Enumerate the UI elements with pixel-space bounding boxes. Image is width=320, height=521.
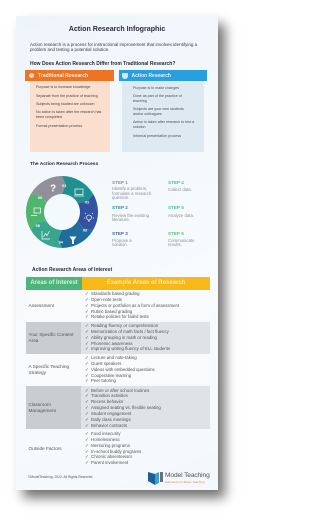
checklist: ✓ Recess behavior — [85, 399, 123, 404]
segment numbers: 06 — [38, 196, 42, 200]
checklist: ✓ Open-note tests — [85, 297, 122, 302]
step 2 — [112, 205, 149, 222]
checklist: ✓ Daily class meetings — [85, 417, 131, 422]
header bar — [119, 70, 207, 81]
segment numbers: 05 — [36, 224, 40, 228]
checklist: ✓ Videos with embedded questions — [85, 367, 155, 372]
list item: Purpose is to increase knowledge — [36, 85, 90, 89]
title: Action Research Infographic — [69, 25, 165, 33]
checklist — [85, 388, 161, 428]
step 6 — [168, 231, 195, 247]
list item: been completed — [36, 114, 62, 118]
segment numbers: 03 — [83, 228, 87, 232]
checklist — [85, 291, 180, 319]
list item: Subjects are your own students — [133, 107, 184, 111]
checklist: ✓ Food insecurity — [85, 431, 121, 436]
checklist: ✓ Projects or portfolios as a form of assessment — [85, 303, 179, 308]
table header: example areas: Example Areas of Research — [107, 280, 185, 286]
step label: STEP 1 — [112, 180, 128, 185]
step 4 — [168, 180, 192, 192]
segment numbers: 01 — [62, 184, 66, 188]
step text — [112, 186, 152, 200]
heading: comparison: How Does Action Research Differ from Traditional Research? — [30, 60, 175, 66]
panel: traditional research — [25, 70, 114, 152]
copyright: ©ModelTeaching, 2022. All Rights Reserved — [28, 475, 92, 479]
checklist: ✓ Standards based grading — [85, 291, 140, 296]
list item: teaching — [133, 98, 147, 102]
list item — [133, 107, 184, 116]
row label: Management — [28, 408, 56, 413]
icon: shield — [122, 72, 128, 78]
checklist: ✓ In-school buddy programs — [85, 449, 141, 454]
panel heading: Traditional Research — [38, 73, 88, 79]
logo: Model Teaching — [148, 472, 210, 485]
list item: No action is taken after the research has — [36, 110, 101, 114]
row label: A Specific Teaching — [28, 364, 69, 369]
row label: Strategy — [28, 370, 46, 375]
checklist: ✓ Cooperative learning — [85, 373, 131, 378]
list item: Subjects being studied are unknown — [36, 102, 94, 106]
segment numbers: 04 — [59, 240, 64, 244]
row label: Area — [28, 338, 38, 343]
row label — [28, 364, 69, 375]
checklist: ✓ Guest speakers — [85, 361, 121, 366]
list item: Action is taken after research to test a — [133, 120, 194, 124]
table: areas of interest — [26, 277, 210, 465]
step label: STEP 4 — [168, 180, 184, 185]
table header: areas of interest — [26, 277, 82, 290]
checklist: ✓ Memorization of math facts / fact fluency — [85, 329, 169, 334]
row: assessment — [26, 290, 210, 321]
intro text: problem and testing a potential solution. — [30, 47, 110, 52]
step text: formulate a research — [112, 190, 151, 196]
table header: areas of interest: Areas of Interest — [30, 280, 78, 286]
heading: process: The Action Research Process — [30, 162, 98, 167]
step text: Communicate — [168, 238, 195, 242]
checklist: ✓ Parent involvement — [85, 460, 128, 465]
row: classroom management — [26, 386, 210, 429]
checklist: ✓ Lecture and note-taking — [85, 355, 137, 360]
row label: Assessment — [28, 303, 54, 308]
icon: light bulb — [84, 213, 94, 221]
step text — [112, 238, 132, 247]
list item — [133, 94, 182, 103]
list item: and/or colleagues — [133, 112, 162, 116]
icon: book — [148, 472, 163, 485]
panel: action research — [119, 70, 207, 152]
step text: Review the existing — [112, 212, 149, 218]
list item: Separate from the practice of teaching — [36, 94, 98, 98]
intro text: Action research is a process for instructional improvement that involves identifying a — [30, 42, 197, 47]
checklist: ✓ Assigned seating vs. flexible seating — [85, 405, 161, 410]
table header: example areas — [82, 277, 210, 290]
checklist: ✓ Chronic absenteeism — [85, 454, 132, 459]
header bar — [25, 70, 114, 81]
step text — [112, 212, 149, 222]
step 3 — [112, 231, 132, 247]
checklist: ✓ Homelessness — [85, 437, 120, 442]
list item: Formal presentation process — [36, 124, 82, 128]
icon: monitor — [74, 189, 84, 196]
row label: Outside Factors — [28, 446, 62, 451]
intro text — [30, 42, 198, 52]
checklist — [85, 431, 142, 465]
checklist: ✓ Student engagement — [85, 411, 131, 416]
checklist: ✓ Reading fluency or comprehension — [85, 323, 158, 328]
checklist: ✓ Phonemic awareness — [85, 341, 133, 346]
checklist: ✓ Rubric based grading — [85, 309, 132, 314]
step label: STEP 6 — [168, 231, 184, 236]
list item: Done as part of the practice of — [133, 94, 182, 98]
step text — [168, 238, 195, 247]
icon: presentation board — [31, 208, 40, 216]
row label — [26, 386, 81, 429]
icon: question mark: ? — [50, 184, 56, 194]
step 1 — [112, 180, 152, 200]
logo wordmark: Model Teaching — [165, 472, 210, 479]
checklist: ✓ Improving writing fluency of ELL students — [85, 346, 170, 351]
list item: Informal presentation process — [133, 134, 181, 138]
step text: question. — [112, 195, 129, 200]
icon: badge — [28, 73, 34, 78]
checklist: ✓ Retake policies for failed tests — [85, 314, 149, 319]
step text: literature. — [112, 217, 130, 222]
segment numbers: 02 — [85, 200, 89, 204]
row label: Classroom — [28, 402, 51, 407]
row: content area — [26, 322, 210, 354]
panel heading: Action Research — [132, 73, 171, 79]
row label: Your Specific Content — [28, 332, 73, 337]
checklist — [85, 323, 170, 351]
logo tagline: Educators for Better Teaching — [165, 480, 204, 484]
list item: solution — [133, 124, 146, 128]
step text: Propose a — [112, 238, 132, 242]
checklist — [85, 355, 155, 383]
segment numbers — [36, 184, 89, 244]
checklist: ✓ Peer tutoring — [85, 378, 116, 383]
list item — [133, 120, 194, 128]
checklist: ✓ Behavior contracts — [85, 423, 127, 428]
step text: Collect data. — [168, 186, 192, 192]
step text: Analyze data. — [168, 213, 194, 218]
panel body — [30, 81, 110, 152]
step text: results. — [168, 242, 182, 247]
step text: solution. — [112, 242, 128, 247]
list item: Purpose is to make changes — [133, 86, 179, 90]
step text: Identify a problem, — [112, 186, 147, 191]
chart: process cycle donut — [26, 176, 98, 248]
checklist: ✓ Before or after school routines — [85, 388, 149, 392]
row: outside factors — [28, 431, 142, 465]
row: teaching strategy — [26, 354, 210, 386]
checklist: ✓ Transition activities — [85, 393, 128, 398]
list item — [36, 110, 102, 119]
icon: line chart — [42, 231, 50, 239]
checklist: ✓ Ability grouping in math or reading — [85, 335, 157, 340]
step label: STEP 3 — [112, 231, 128, 236]
step label: STEP 5 — [168, 205, 184, 210]
step 5 — [168, 205, 194, 218]
panel body — [122, 81, 204, 152]
heading: areas of interest: Action Research Areas of Interest — [32, 267, 112, 273]
icon: funnel — [70, 236, 76, 244]
page panel — [16, 16, 218, 490]
checklist: ✓ Mentoring programs — [85, 443, 130, 448]
step label: STEP 2 — [112, 205, 128, 210]
row label — [26, 322, 81, 354]
